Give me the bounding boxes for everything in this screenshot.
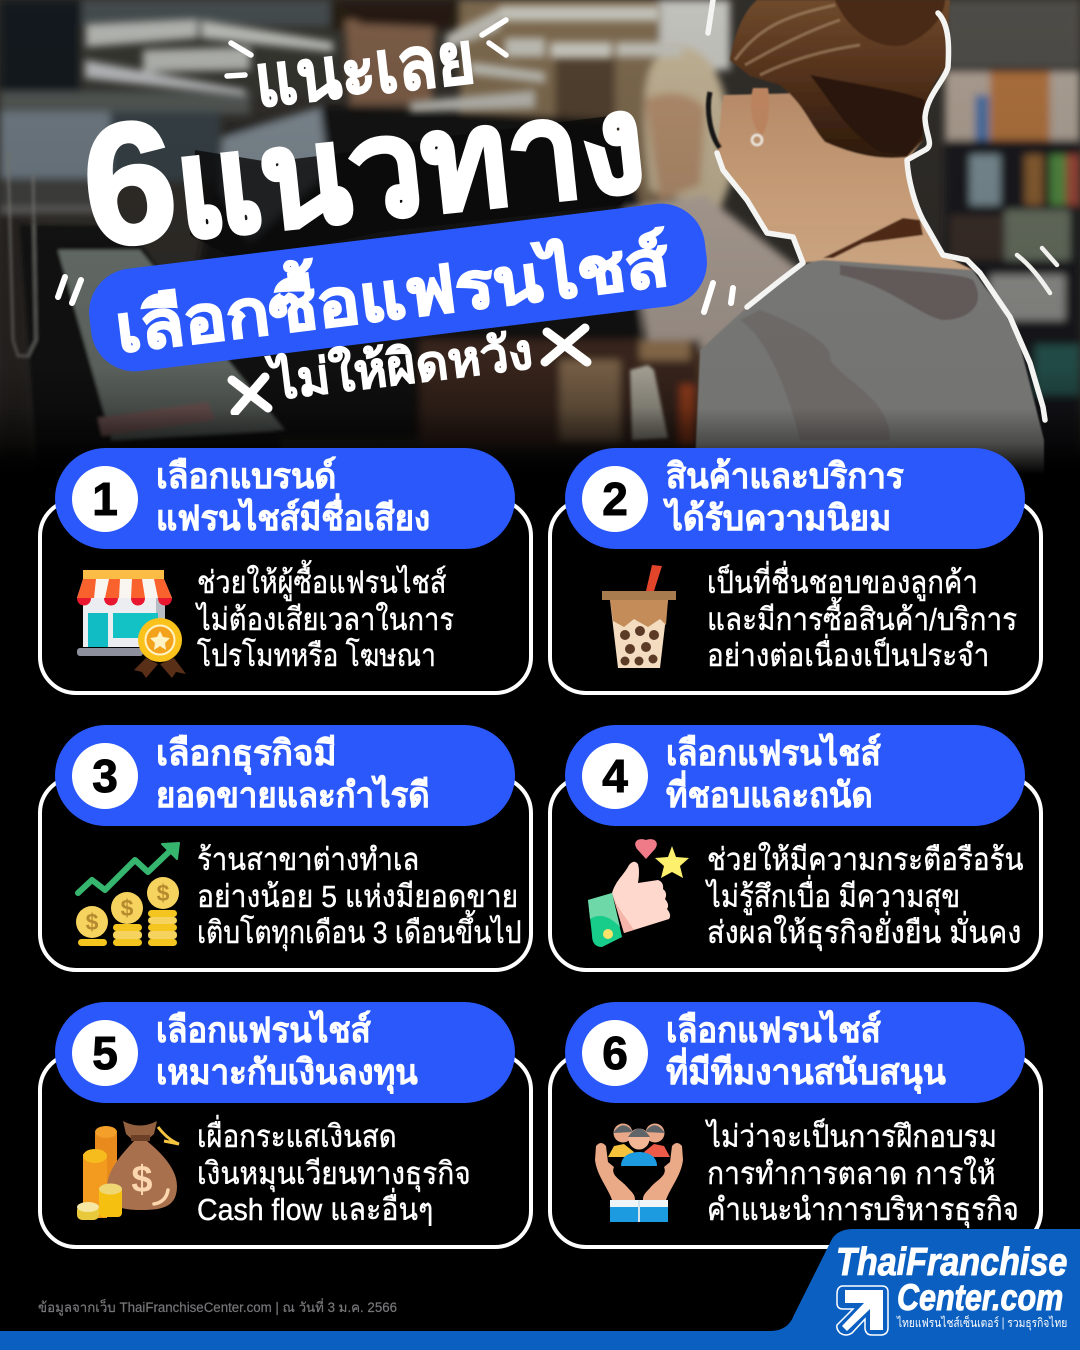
heading pill 5	[55, 1002, 515, 1103]
body text 4: ส่งผลให้ธุรกิจยั่งยืน มั่นคง	[707, 915, 1021, 950]
body text 3: ร้านสาขาต่างทำเล	[197, 842, 419, 877]
heading text 3: ยอดขายและกำไรดี	[156, 776, 430, 815]
number badge 5	[72, 1020, 138, 1086]
body text 3: เติบโตทุกเดือน 3 เดือนขึ้นไป	[197, 915, 522, 950]
heading text 6: ที่มีทีมงานสนับสนุน	[666, 1053, 946, 1092]
heading pill 2	[565, 448, 1025, 549]
heading text 1	[156, 456, 430, 538]
heading text 4: เลือกแฟรนไชส์	[666, 734, 881, 773]
heading text 2: สินค้าและบริการ	[666, 457, 904, 496]
heading pill 3	[55, 725, 515, 826]
body text 2	[707, 560, 1017, 673]
body text 4: ช่วยให้มีความกระตือรือร้น	[707, 842, 1024, 877]
body text 1: ช่วยให้ผู้ซื้อแฟรนไชส์	[197, 565, 446, 600]
body text 2: และมีการซื้อสินค้า/บริการ	[707, 602, 1017, 636]
body text 5: เผื่อกระแสเงินสด	[197, 1119, 397, 1154]
footer bar	[0, 1331, 1080, 1350]
icon: growth arrow and coins	[75, 842, 180, 946]
background photo	[0, 0, 1080, 471]
icon: growth arrow and coins: $	[157, 880, 170, 906]
icon: money bag and coin stacks: $	[131, 1159, 153, 1201]
logo panel	[770, 1229, 1080, 1336]
icon: hands holding team	[595, 1124, 683, 1222]
body text 5: เงินหมุนเวียนทางธุรกิจ	[197, 1156, 471, 1190]
icon: bubble tea cup	[602, 565, 676, 668]
subtitle: ไม่ให้ผิดหวัง	[269, 323, 536, 410]
body text 6	[704, 1118, 1019, 1228]
heading text 4: ที่ชอบและถนัด	[666, 776, 873, 815]
heading text 6	[666, 1010, 946, 1094]
icon: growth arrow and coins: $	[86, 909, 99, 935]
body text 4	[705, 842, 1024, 952]
icon: cross marks	[228, 324, 592, 415]
panel: card 3 sales and profit	[38, 725, 533, 972]
panel: card 2 popular product	[548, 448, 1043, 695]
heading text 4	[666, 732, 881, 815]
body text 6: คำแนะนำการบริหารธุรกิจ	[707, 1192, 1019, 1227]
heading text 3	[156, 734, 430, 815]
number badge 2	[582, 466, 648, 532]
heading pill 1	[55, 448, 515, 549]
title: small headline: แนะเลย	[251, 18, 479, 122]
decorative dashes beside headline	[224, 17, 509, 79]
body text 3	[197, 842, 522, 952]
number badge 6	[582, 1020, 648, 1086]
number badge 2: 2	[602, 473, 628, 525]
icon: storefront with award ribbon	[77, 570, 186, 678]
pill text: เลือกซื้อแฟรนไชส์	[112, 226, 673, 366]
icon: thumbs up with heart and star	[588, 839, 689, 947]
number badge 1	[72, 466, 138, 532]
panel: card 6 team support	[548, 1002, 1043, 1249]
body text 2: เป็นที่ชื่นชอบของลูกค้า	[707, 565, 978, 600]
heading text 5: เหมาะกับเงินลงทุน	[156, 1053, 418, 1092]
panel: card 5 budget	[38, 1002, 533, 1249]
number badge 6: 6	[602, 1027, 628, 1079]
icon: growth arrow and coins: $	[121, 895, 134, 921]
panel: card 1 brand	[38, 448, 533, 695]
panel: card 4 enjoyment	[548, 725, 1043, 972]
number badge 3: 3	[92, 750, 118, 802]
number badge 3	[72, 743, 138, 809]
title: big number and word: 6แนวทาง	[74, 66, 652, 284]
heading pill 6	[565, 1002, 1025, 1103]
body text 6: การทำการตลาด การให้	[707, 1156, 996, 1190]
body text 5	[197, 1114, 471, 1227]
logo wordmark: ThaiFranchise	[836, 1241, 1067, 1284]
number badge 4: 4	[602, 750, 628, 802]
heading text 2: ได้รับความนิยม	[666, 499, 891, 538]
body text 4: ไม่รู้สึกเบื่อ มีความสุข	[707, 878, 960, 914]
woman cutout outline	[708, 0, 1045, 420]
number badge 1: 1	[92, 473, 118, 525]
body text 3: อย่างน้อย 5 แห่งมียอดขาย	[197, 878, 518, 914]
heading text 1: เลือกแบรนด์	[156, 457, 336, 496]
body text 1: โปรโมทหรือ โฆษณา	[197, 638, 436, 673]
heading text 5: เลือกแฟรนไชส์	[156, 1011, 371, 1050]
icon: money bag and coin stacks	[77, 1121, 180, 1220]
heading pill 4	[565, 725, 1025, 826]
logo tagline: ไทยแฟรนไชส์เซ็นเตอร์ | รวมธุรกิจไทย	[897, 1316, 1067, 1330]
heading text 2	[662, 457, 904, 538]
body text 2: อย่างต่อเนื่องเป็นประจำ	[707, 638, 989, 673]
heading text 5	[156, 1010, 418, 1094]
body text 6: ไม่ว่าจะเป็นการฝึกอบรม	[707, 1119, 997, 1154]
logo arrow mark	[837, 1286, 888, 1335]
long shadow behind the title	[190, 116, 640, 262]
body text 1: ไม่ต้องเสียเวลาในการ	[197, 602, 454, 636]
heading text 3: เลือกธุรกิจมี	[156, 734, 337, 773]
heading text 6: เลือกแฟรนไชส์	[666, 1011, 881, 1050]
woman seen from behind	[693, 0, 1044, 510]
body text 5: Cash flow และอื่นๆ	[197, 1192, 433, 1227]
number badge 4	[582, 743, 648, 809]
logo domain: Center.com	[897, 1277, 1063, 1318]
number badge 5: 5	[92, 1027, 118, 1079]
body text 1	[195, 560, 454, 673]
quote marks	[55, 274, 736, 315]
heading text 1: แฟรนไชส์มีชื่อเสียง	[156, 499, 430, 538]
source note: ข้อมูลจากเว็บ ThaiFranchiseCenter.com | ณ วันที่ 3 ม.ค. 2566	[38, 1300, 397, 1315]
title: blue highlighted pill	[84, 199, 712, 376]
